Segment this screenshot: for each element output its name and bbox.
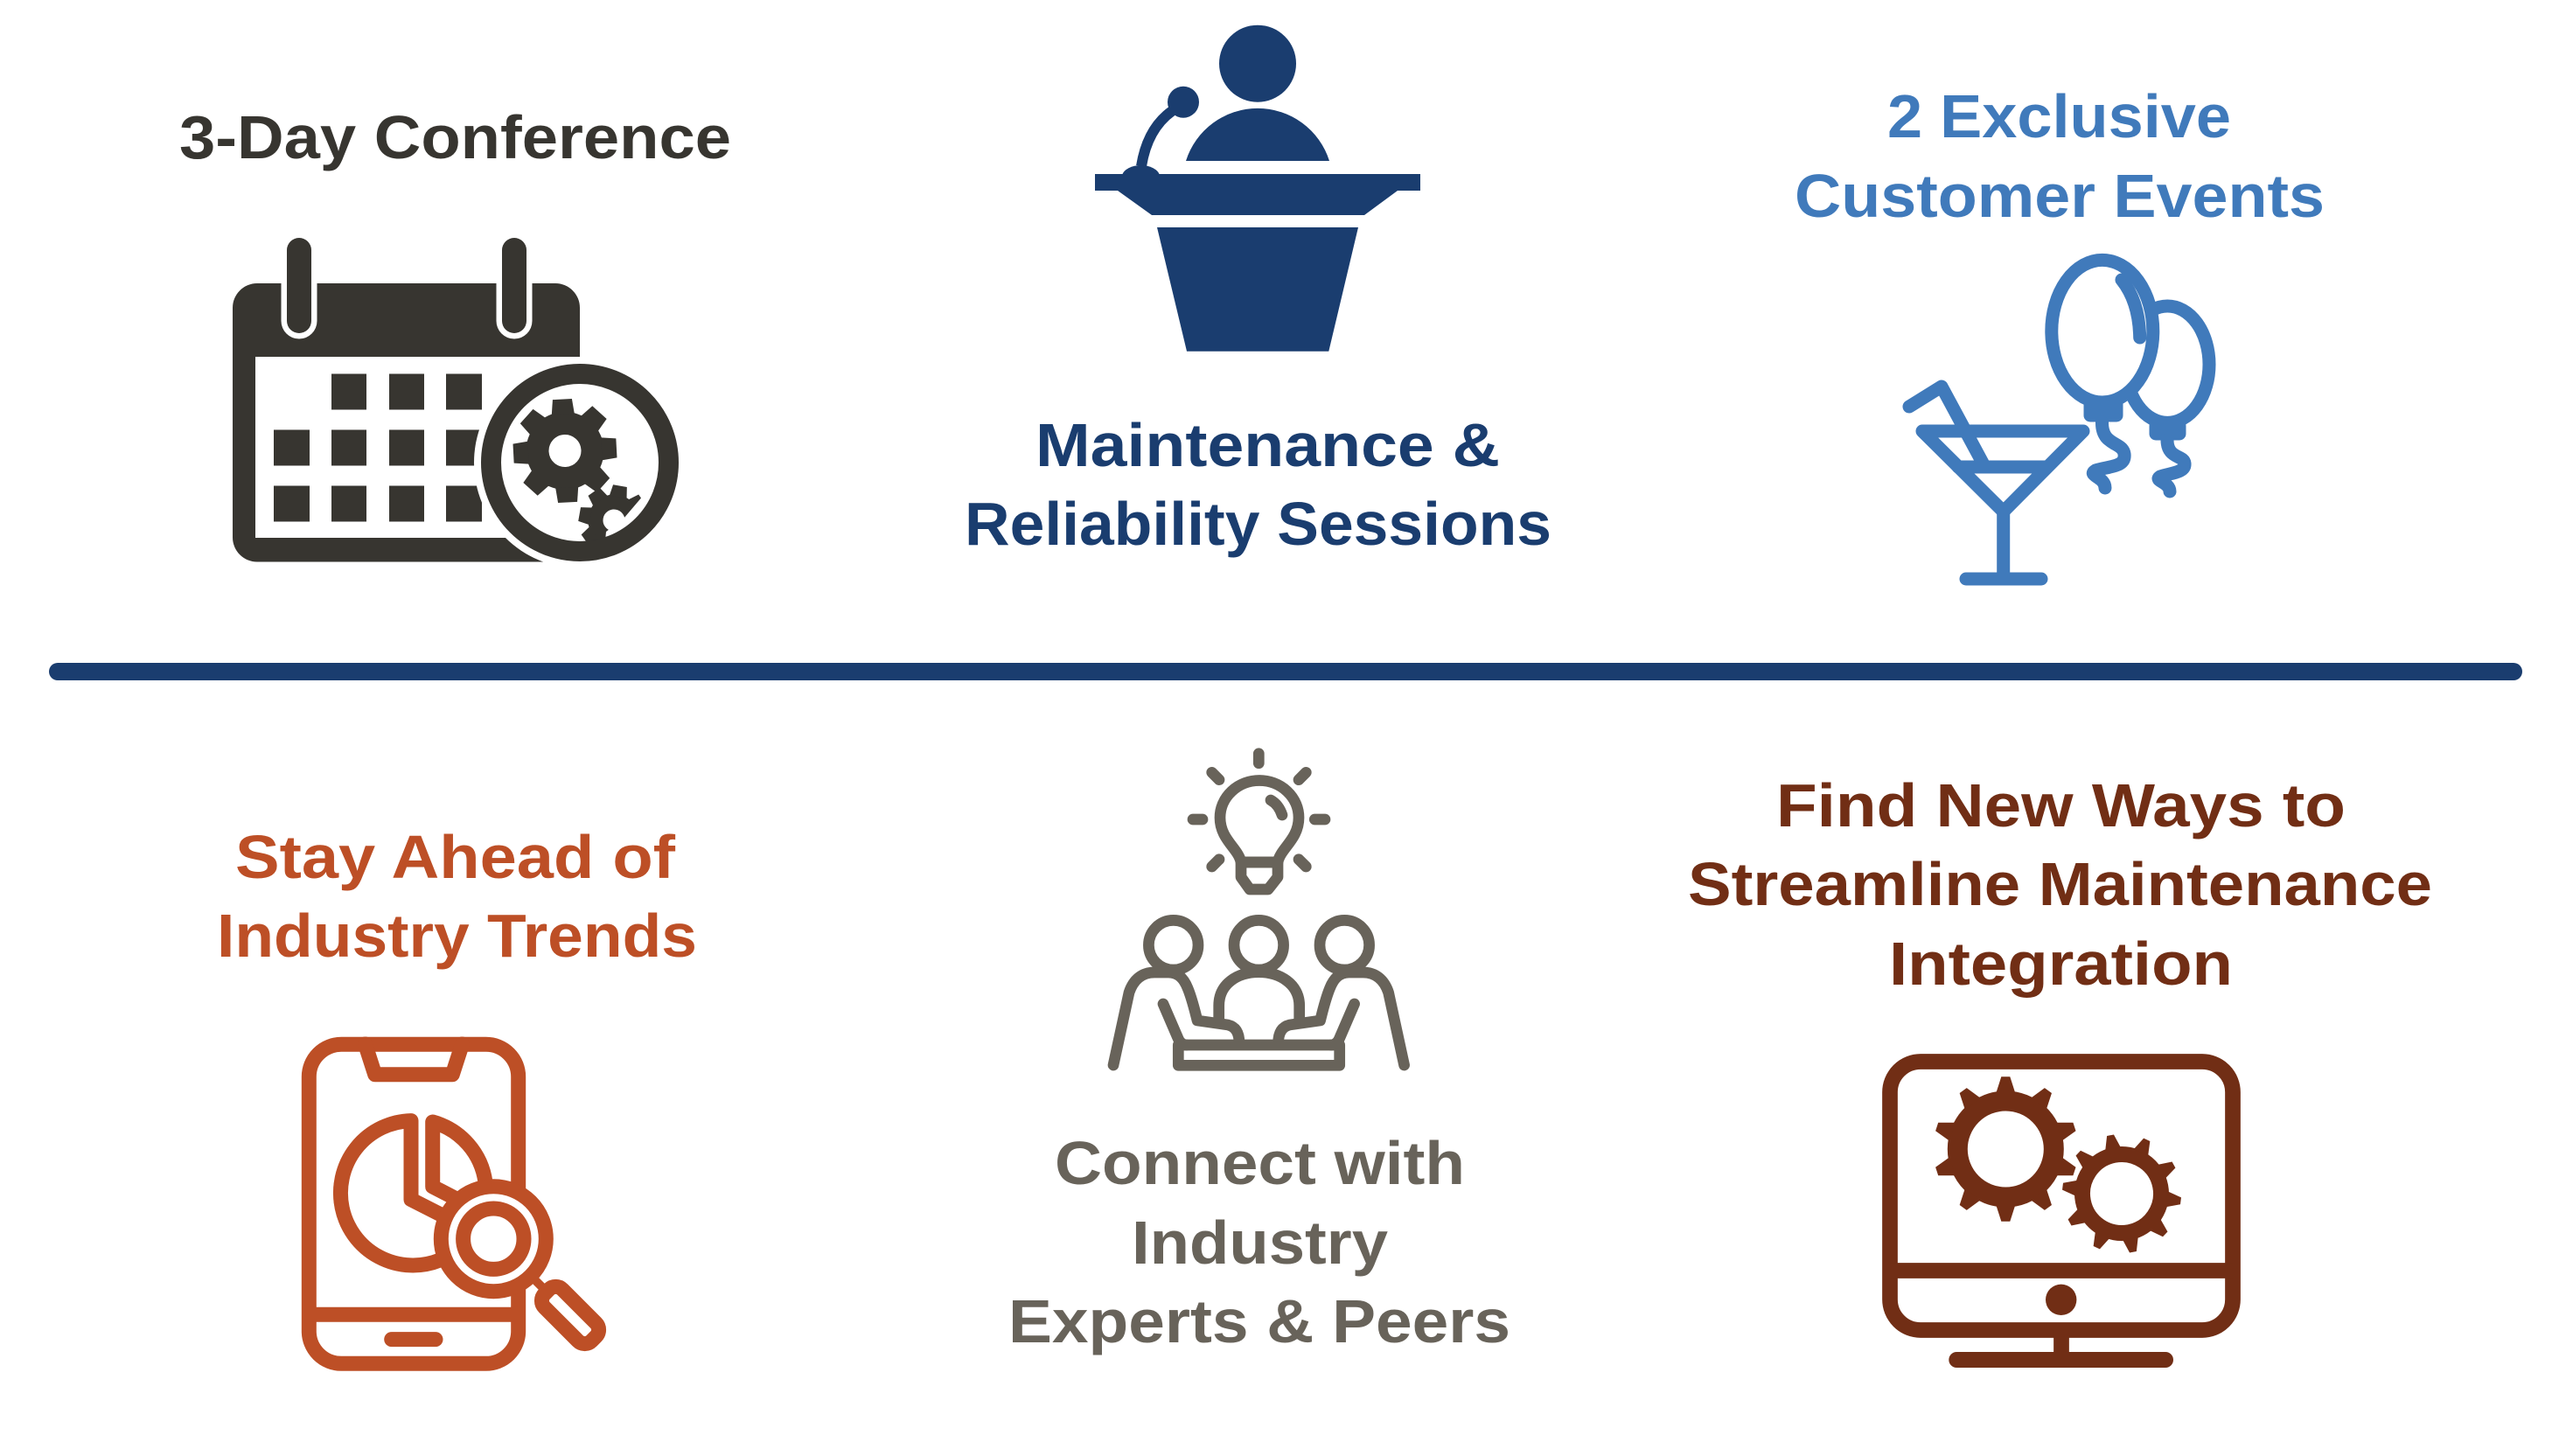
icon: speaker at podium [1095, 25, 1420, 352]
heading: 2 Exclusive Customer Events: Customer Events [1795, 162, 2325, 230]
panel: Find New Ways to Streamline Maintenance Integration [1688, 771, 2432, 1360]
heading: 2 Exclusive Customer Events: 2 Exclusive [1887, 82, 2231, 150]
icon: people meeting under a light bulb [1113, 754, 1405, 1065]
heading: Stay Ahead of Industry Trends: Stay Ahead of [235, 823, 676, 891]
heading: Maintenance & Reliability Sessions: Maintenance & [1035, 411, 1500, 479]
heading: 3-Day Conference: 3-Day Conference [179, 103, 731, 171]
panel: Stay Ahead of Industry Trends [217, 823, 697, 1363]
heading: Maintenance & Reliability Sessions: Reliability Sessions [965, 490, 1551, 558]
heading: Stay Ahead of Industry Trends: Industry Trends [217, 902, 697, 970]
panel: 3-Day Conference [179, 103, 731, 568]
heading: Connect with Industry Experts & Peers: Experts & Peers [1008, 1287, 1510, 1355]
heading: 2 Exclusive Customer Events [1795, 82, 2325, 230]
heading: Find New Ways to Streamline Maintenance Integration: Streamline Maintenance [1688, 850, 2432, 918]
icon: calendar with gears [233, 250, 686, 568]
heading: Maintenance & Reliability Sessions [965, 411, 1551, 558]
icon: cocktail and balloons [1909, 260, 2209, 579]
icon: phone with pie chart and magnifier [309, 1044, 603, 1363]
panel: Maintenance & Reliability Sessions [965, 25, 1551, 558]
heading: Find New Ways to Streamline Maintenance Integration: Find New Ways to [1776, 771, 2346, 839]
panel: Connect with Industry Experts & Peers [1008, 754, 1510, 1355]
heading: Connect with Industry Experts & Peers: Industry [1132, 1209, 1388, 1277]
heading: Find New Ways to Streamline Maintenance Integration [1688, 771, 2432, 998]
heading: Connect with Industry Experts & Peers [1008, 1129, 1510, 1355]
icon: monitor with gears [1890, 1062, 2233, 1360]
panel: 2 Exclusive Customer Events [1795, 82, 2325, 579]
heading: Stay Ahead of Industry Trends [217, 823, 697, 970]
divider line [49, 663, 2522, 680]
heading: Connect with Industry Experts & Peers: Connect with [1055, 1129, 1465, 1197]
heading: Find New Ways to Streamline Maintenance Integration: Integration [1889, 930, 2233, 998]
